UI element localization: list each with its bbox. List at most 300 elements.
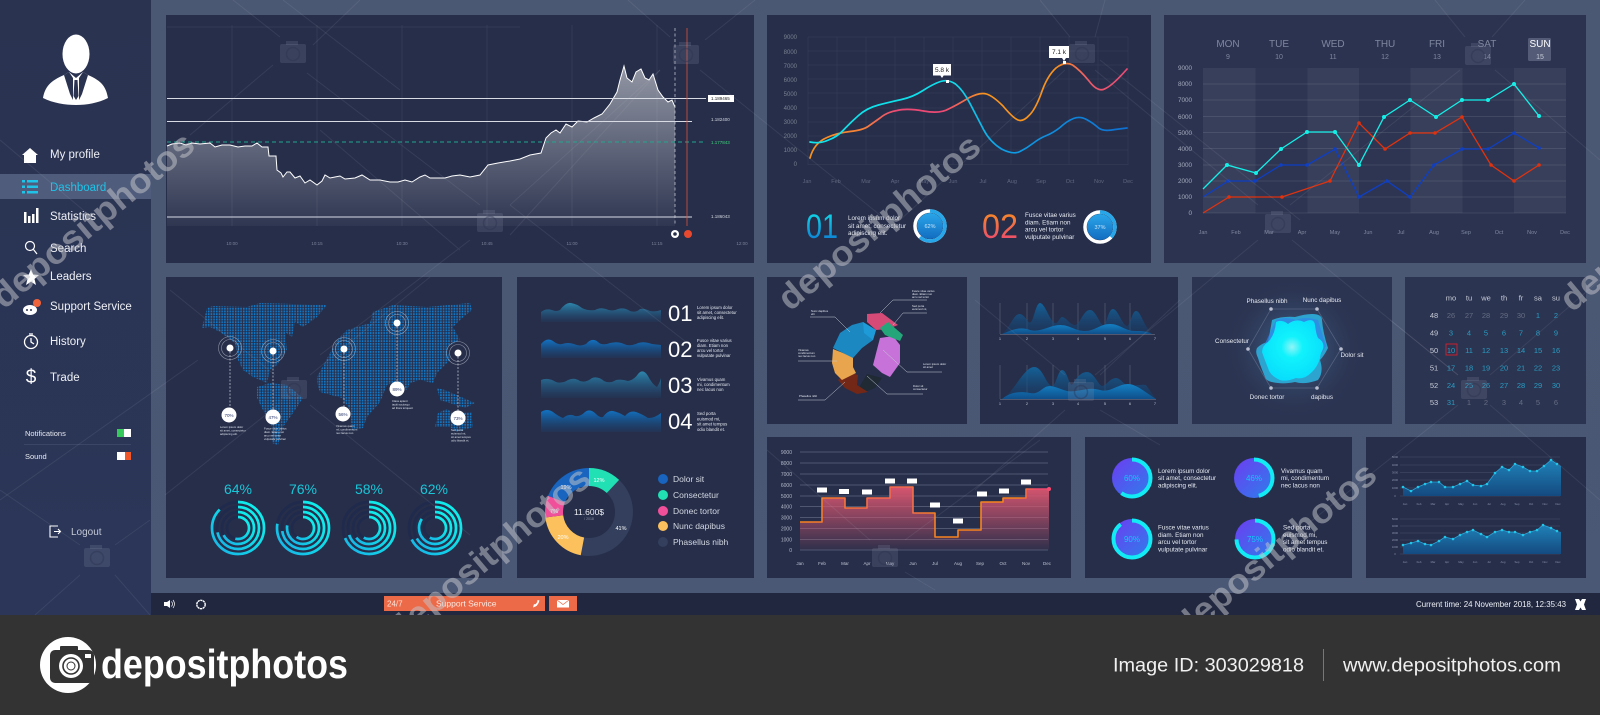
wave row 01: 01 [668,301,692,326]
radar labels: Phasellus nibh [1247,298,1288,305]
bottom area chart: Feb [1417,560,1422,564]
wave row 03: mi, condimentum [697,382,730,387]
top peak chart: 7 [1154,337,1156,341]
donut chart: / 2018 [584,517,594,521]
disc 90%: 90% [1124,535,1140,544]
map pin: 73%: 73% [453,416,463,421]
ring gauge: 62% [409,481,461,554]
calendar days: 30 [1552,381,1560,390]
cursor lines and markers [671,28,692,238]
calendar days: 21 [1517,364,1525,372]
selected day: SUN 15: 15 [1536,54,1544,61]
x axis labels: Jun [1364,230,1372,236]
x axis labels: Oct [1495,230,1504,236]
calendar days: 17 [1447,364,1455,372]
bottom area chart: Sep [1515,560,1520,564]
text: disc 90%: diam. Etiam non [1158,532,1204,539]
text: disc 60% [1158,468,1216,490]
x axis labels: Jun [909,561,917,566]
ring gauge: 76% [277,481,329,554]
time axis labels: 10:45 [481,241,493,246]
top area chart: Nov [1543,502,1548,506]
top area chart: Jan [1403,502,1408,506]
donut chart: 12% [593,478,605,484]
wave row 02: Fusce vitae varius [697,338,732,343]
x axis labels: Nov [1527,230,1537,236]
text: disc 75%: euismod mi, [1283,532,1317,539]
y axis labels: 0 [794,162,798,168]
calendar days: 10 [1447,346,1455,355]
bottom area chart: Apr [1445,560,1449,564]
map pin: 47%: 47% [268,415,278,420]
calendar days: 15 [1534,346,1542,355]
stat 01: sit amet, consectetur [848,223,906,230]
wave row 04: sit amet tempus [697,422,727,426]
bottom area chart: 3000 [1392,531,1399,535]
top peak chart: 3 [1052,337,1054,341]
ring labels: Phasellus nibh [799,394,818,398]
bottom area chart: Dec [1556,560,1561,564]
step area series [800,487,1051,550]
top peak chart: 4 [1077,337,1079,341]
map pin: 56%: nec lacus non [336,431,354,435]
text: disc 60%: adipiscing elit. [1158,482,1198,490]
stat 02: Fusce vitae varius [1025,212,1076,219]
ring labels: Fusce vitae varius [912,289,935,293]
panel: 3D ring chart [767,277,967,424]
wave row 01: Lorem ipsum dolor [697,305,733,310]
wave row 04: Sed porta [697,411,716,416]
bottom peak chart: 5 [1104,402,1106,406]
week numbers: 48 [1430,311,1438,320]
icon: chat badge [23,299,41,315]
top area chart: Aug [1501,502,1506,506]
x axis labels: May [886,561,895,566]
panel: peak charts [980,277,1178,424]
radar labels: Consectetur [1215,338,1249,345]
calendar days: 26 [1447,311,1455,320]
y axis labels: 5000 [1178,130,1192,137]
calendar days: 2 [1554,311,1558,320]
support service bar: 24/7 [387,600,403,608]
weekday header: th [1501,294,1507,302]
support service bar [384,596,545,611]
y axis labels: 2000 [784,134,798,140]
top area chart: 4000 [1392,463,1399,467]
weekday header: we [1480,294,1491,302]
y axis labels: 5000 [784,92,798,98]
calendar days: 4 [1519,398,1523,407]
icon: history clock [24,334,38,348]
wave row 03: Vivamus quam [697,377,726,382]
x axis labels [1199,230,1570,236]
disc 75%: 75% [1247,535,1263,544]
area series [167,66,675,226]
menu item: Leaders: Leaders [50,271,92,283]
ring labels: Dolor sit [913,384,923,388]
map pin: 56% [332,338,358,435]
map pin: 70%: 70% [224,413,234,418]
selected day: SUN 15 [1528,38,1551,61]
map pin: 73%: sit amet tempus [451,435,471,439]
x axis labels: Dec [1043,561,1052,566]
donut chart: 11.600$ [574,507,604,517]
x axis labels [803,179,1133,185]
top area chart: Oct [1529,502,1533,506]
top peak chart: 1 [999,337,1001,341]
text: disc 75%: Sed porta [1283,524,1311,532]
calendar days: 3 [1449,328,1453,338]
watermark: depositphotos text: depositphotos [1166,454,1384,646]
stat 02: 02 [982,208,1018,246]
bottom peak chart: 1 [999,402,1001,406]
top area chart: Feb [1417,502,1422,506]
selected day: SUN 15: SUN [1529,39,1551,50]
text: disc 60%: Lorem ipsum dolor [1158,468,1210,475]
week numbers: 52 [1430,381,1438,390]
calendar days: 28 [1482,311,1490,320]
calendar days: 25 [1465,381,1473,390]
weekday columns [1203,68,1566,213]
price tags [708,95,734,219]
calendar days: 27 [1500,381,1508,390]
y axis labels: 6000 [781,483,792,489]
y axis labels: 3000 [1178,162,1192,169]
radar blob layers [1256,314,1328,383]
calendar days: 29 [1500,311,1508,320]
menu item: My profile: My profile [50,149,100,161]
bottom area chart: 2000 [1392,538,1399,542]
price tags: 1.189465 [711,96,730,101]
text: disc 90%: Fusce vitae varius [1158,524,1209,532]
bottom peak chart: 6 [1129,402,1131,406]
map pin: 89%: ad litora torquent [392,406,413,410]
top area chart: 2000 [1392,478,1399,482]
map pin: 89%: taciti sociosqu [392,402,410,406]
x axis labels: Dec [1560,230,1570,236]
watermark: depositphotos text [0,124,1600,650]
top area chart [1392,455,1561,506]
donut legend: Phasellus nibh [673,537,729,547]
panel: price area chart [166,15,754,263]
watermark: depositphotos text: depositphotos [380,458,598,650]
gauge 62%: 62% [924,224,936,230]
selected date box [1446,344,1457,355]
menu item: Support Service: Support Service [50,301,132,313]
image id: Image ID: 303029818 [1113,656,1304,676]
ring gauge: 64%: 64% [224,481,252,497]
disc 60%: 60% [1124,474,1140,483]
day headers [1216,39,1496,61]
top area chart: Apr [1445,502,1449,506]
x axis labels: Apr [891,179,899,185]
wave row 01: adipiscing elit. [697,315,724,320]
ring labels [798,289,946,398]
top area chart: Mar [1431,502,1435,506]
watermark cameras [84,41,1491,567]
stat 02 [982,208,1115,246]
donut chart [550,477,627,547]
x axis labels: Aug [1429,230,1439,236]
top area chart: Dec [1556,502,1561,506]
ring labels: Nunc dapibus [811,309,829,313]
support service bar: Support Service [436,598,497,608]
x axis labels: Jan [803,179,811,185]
stat 02: diam. Etiam non [1025,220,1071,226]
top peak chart [999,303,1156,341]
calendar days: 24 [1447,381,1455,390]
x axis labels: Nov [1022,561,1031,566]
calendar days: 4 [1467,328,1471,338]
x axis labels: Jan [1199,230,1207,236]
bottom peak chart [999,365,1156,406]
y axis labels: 2000 [1178,178,1192,185]
map pin: 47%: arcu vel tortor [264,434,281,438]
wave row 02: 02 [668,337,692,362]
map pin: 70% [218,336,246,436]
bottom area chart: 1000 [1392,545,1399,549]
map pin: 47%: vulputate pulvinar [264,437,286,441]
value tags [817,478,1031,524]
bottom area chart: Mar [1431,560,1435,564]
y axis labels [784,35,798,168]
donut chart: 19% [560,485,572,491]
radar hexagon [1248,309,1341,388]
calendar days: 30 [1517,311,1525,320]
top area chart: Sep [1515,502,1520,506]
line: red series [1203,115,1541,213]
price level lines [167,98,706,217]
map pin: 56%: Vivamus quam [336,424,355,428]
radar labels: Nunc dapibus [1303,297,1341,304]
x axis labels: May [1330,230,1340,236]
radar labels: Dolor sit [1340,352,1364,359]
day headers: 14 [1483,54,1491,61]
toggle: sound [117,452,131,460]
map pin: 89%: 89% [392,387,402,392]
day headers: 11 [1329,54,1337,61]
bottom peak chart: 2 [1026,402,1028,406]
map pin: 73%: Sed porta [451,428,464,432]
text: disc 46%: mi, condimentum [1281,475,1329,482]
y axis labels: 0 [1188,210,1192,217]
bottom area chart [1392,517,1561,564]
icon: dashboard list [22,180,38,194]
x axis labels: Jul [932,561,938,566]
top area chart: May [1458,502,1464,506]
wave row 04 [541,409,727,434]
wave row 03: nec lacus non [697,387,724,392]
logo: wordmark: depositphotos [101,641,348,687]
3D ring segments [832,313,903,394]
bottom peak chart: 3 [1052,402,1054,406]
calendar days: 26 [1482,381,1490,390]
weekday header: sa [1534,294,1543,302]
callout: 5.8k [933,64,951,83]
ring labels: Vivamus [798,348,809,352]
stat 01: adipiscing elit. [848,230,888,237]
y axis labels: 9000 [784,35,798,41]
wave row 03: 03 [668,373,692,398]
calendar days: 19 [1482,364,1490,372]
y axis labels: 1000 [781,538,792,544]
day headers: MON [1216,39,1240,50]
y axis labels: 6000 [1178,114,1192,121]
donut chart: 7% [550,509,558,515]
donut legend: Consectetur [673,490,719,500]
stat 01: Lorem ipsum dolor [848,215,900,222]
calendar days: 12 [1482,346,1490,355]
ring gauge: 58%: 58% [355,481,383,497]
ring gauge: 58% [343,481,395,554]
calendar days: 11 [1465,346,1473,355]
text: disc 46%: Vivamus quam [1281,468,1323,475]
logo: camera badge [40,637,96,693]
calendar days: 13 [1500,346,1508,355]
time axis labels: 11:00 [567,241,578,246]
menu item: Dashboard: Dashboard [50,182,106,194]
top peak chart: 6 [1129,337,1131,341]
map pin: 73%: euismod mi, [451,432,466,436]
callout: 7.1k: 7.1 k [1052,49,1067,56]
wave row 02 [541,337,732,362]
toggle: notifications [117,429,131,437]
map pin: 47% [262,340,287,441]
week numbers: 51 [1430,364,1438,372]
week numbers [1430,311,1438,407]
weekday header: fr [1519,294,1524,302]
calendar days: 8 [1536,328,1540,338]
gauge 37%: 37% [1094,225,1106,231]
y axis labels [781,450,792,554]
day headers: 9 [1226,54,1230,61]
current time: Current time: 24 November 2018, 12:35:43 [1416,600,1566,609]
time axis labels: 10:15 [311,241,323,246]
ring gauge: 64% [212,481,264,554]
bottom area chart: Jul [1487,560,1491,564]
donut legend [658,474,729,547]
watermark: depositphotos text: depositphotos [770,126,988,318]
top area chart: 3000 [1392,470,1399,474]
calendar days: 18 [1465,364,1473,372]
wave row 01 [541,301,737,326]
time axis labels: 11:15 [652,241,663,246]
calendar days: 16 [1552,346,1560,355]
bottom area chart: 5000 [1392,517,1399,521]
time axis labels: 10:30 [396,241,408,246]
wave row 03 [541,371,730,398]
day headers: THU [1375,39,1395,50]
mail button [549,596,577,611]
icon: star [23,269,39,285]
text: disc 90% [1158,524,1209,554]
wave row 02: arcu vel tortor [697,348,724,353]
text: disc 75%: odio blandit et. [1283,546,1324,554]
ring labels: sit amet [923,365,933,369]
text: disc 46%: nec lacus non [1281,482,1320,490]
map pin: 47%: Fusce vitae varius [264,426,287,430]
top peak chart: 5 [1104,337,1106,341]
disc 75% [1235,519,1275,559]
weekday header: tu [1466,294,1472,302]
top area chart: Jul [1487,502,1491,506]
calendar days: 7 [1519,328,1523,338]
text: disc 75% [1283,524,1327,554]
x axis labels: Jun [949,179,957,185]
x axis labels: Dec [1123,179,1133,185]
weekday header: mo [1446,294,1456,302]
top area chart: 0 [1394,494,1396,498]
website: www.depositphotos.com [1342,656,1561,676]
calendar days: 2 [1484,398,1488,407]
wave row 01: sit amet, consectetur [697,310,737,315]
day headers: FRI [1429,39,1445,50]
panel: smooth line chart [767,15,1151,263]
panel: calendar [1405,277,1586,424]
time axis labels: 12:00 [736,241,748,246]
calendar days: 29 [1534,381,1542,390]
x axis labels: Apr [863,561,871,566]
stat 02: arcu vel tortor [1025,226,1064,234]
weekday header: su [1552,294,1560,302]
panel: radar chart [1192,277,1392,424]
ring labels: nec lacus non [798,354,816,358]
stat 02: vulputate pulvinar [1025,234,1074,241]
x axis labels: Oct [999,561,1007,566]
ring leader lines [798,300,942,400]
x axis labels: Mar [1264,230,1274,236]
disc 60% [1112,458,1152,498]
stat 01: 01 [806,208,838,246]
top area chart: Jun [1473,502,1478,506]
menu item: Statistics: Statistics [50,211,96,223]
y axis labels: 1000 [784,148,798,154]
icon: settings gear [197,600,205,609]
bottom area chart: Aug [1501,560,1506,564]
ring labels: Lorem ipsum dolor [923,362,946,366]
panel: small area charts [1366,437,1586,578]
text: disc 60%: sit amet, consectetur [1158,475,1216,482]
calendar days: 1 [1536,311,1540,320]
y axis labels: 6000 [784,78,798,84]
text: disc 90%: arcu vel tortor [1158,539,1196,546]
bottom area chart: May [1458,560,1464,564]
calendar days: 14 [1517,346,1525,355]
day headers: 10 [1275,54,1283,61]
day headers: 13 [1433,54,1441,61]
calendar days: 27 [1465,311,1473,320]
bottom area chart: Nov [1543,560,1548,564]
icon: dollar: $ [26,367,37,388]
calendar days: 23 [1552,364,1560,372]
y axis labels: 7000 [1178,97,1192,104]
panel: step area chart [767,437,1071,578]
y axis labels [1178,65,1192,217]
time axis labels: 10:00 [226,241,238,246]
price tags: 1.186043 [711,214,730,219]
y axis labels: 5000 [781,494,792,500]
x axis labels: Mar [861,179,871,185]
top area chart: 5000 [1392,455,1399,459]
calendar days: 22 [1534,364,1542,372]
map pin: 70%: sit amet, consectetur [220,428,246,432]
donut legend: Nunc dapibus [673,521,725,531]
x axis labels: Nov [1094,179,1104,185]
top area chart: 1000 [1392,486,1399,490]
x axis labels: Apr [1298,230,1306,236]
y axis labels: 4000 [784,106,798,112]
calendar days: 31 [1447,398,1455,407]
